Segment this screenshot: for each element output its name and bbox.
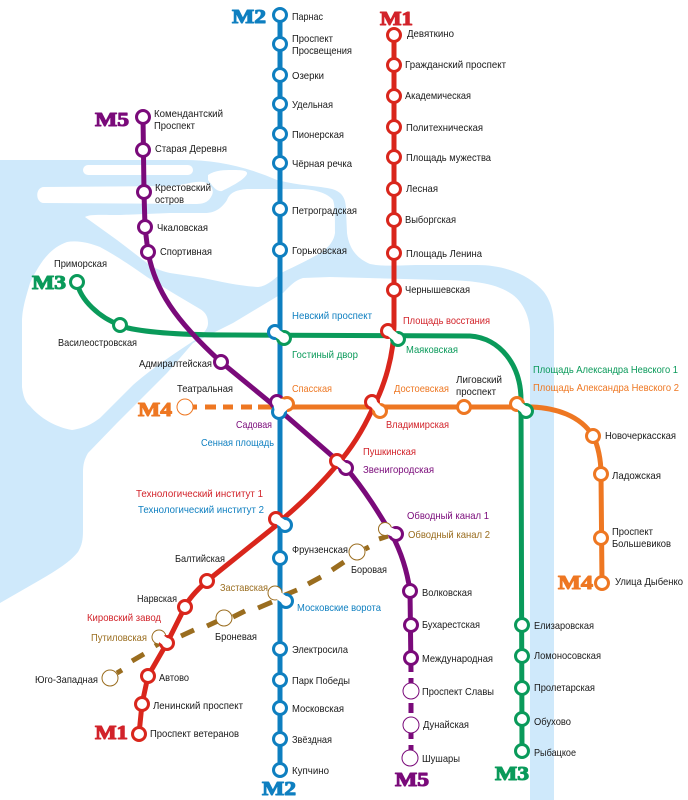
station labels: M1: Проспект ветеранов [150,728,239,740]
station labels: M1: Ленинский проспект [153,700,243,712]
stations: M5 planned purple [402,683,419,766]
interchange: Kirovsky zavod / Putilovskaya [152,630,174,650]
station labels: M3: Рыбацкое [534,747,576,759]
station labels: M5: Чкаловская [157,222,208,234]
line M5 purple dashed extension [408,678,414,750]
station labels: M4: Достоевская [394,383,449,395]
station labels: M2: Невский проспект [292,310,372,322]
station labels: M5: Крестовский [155,182,211,194]
station labels: M4: проспект [456,386,496,398]
station labels: M3: Пролетарская [534,682,595,694]
station labels: M5: Проспект [154,120,195,132]
station labels: M1: Кировский завод [87,612,161,624]
station labels: M4: Лиговский [456,374,502,386]
station labels: M3: Ломоносовская [534,650,601,662]
station labels: M2: Проспект [292,33,333,45]
stations: planned brown [102,544,365,686]
badge: M5 bottom: M5 [395,769,429,791]
station labels: M1: Лесная [406,183,438,195]
station labels: M3: Обухово [534,716,571,728]
badge: M5 top: M5 [95,109,129,131]
station labels: M5: Шушары [422,753,460,765]
station labels: M1: Нарвская [137,593,177,605]
stations: M5 purple [136,110,418,664]
station labels: M2: Парнас [292,11,323,23]
station labels: brown line: Юго-Западная [35,674,98,686]
interchange: Sadovaya / Spasskaya / Sennaya [270,396,294,418]
station labels: M1: Чернышевская [405,284,470,296]
stations: M3 green [70,276,528,758]
interchange: Vosstaniya / Mayakovskaya [382,324,404,346]
station labels: M5: Обводный канал 1 [407,510,489,522]
station labels: M2: Просвещения [292,45,352,57]
station labels: M3: Василеостровская [58,337,137,349]
line M1 red [139,35,394,734]
station labels: M1: Академическая [405,90,471,102]
interchange: Vladimirskaya / Dostoevskaya [366,396,386,418]
station labels: M5: Спортивная [160,246,212,258]
station labels: M3: Маяковская [406,344,458,356]
station labels: M2 [138,11,381,777]
station labels: M5: Звенигородская [363,464,434,476]
interchange: Zastavskaya / Moskovskie vorota [268,586,292,608]
station labels: brown line: Путиловская [91,632,147,644]
station labels: M2: Сенная площадь [201,437,274,449]
station labels: M2: Электросила [292,644,348,656]
station labels: M5: Проспект Славы [422,686,494,698]
station labels: M1: Девяткино [407,28,454,40]
interchange: Tekhnologichesky 1 / 2 [270,512,292,532]
station labels: M1: Гражданский проспект [405,59,506,71]
station labels: M2: Московская [292,703,344,715]
line M3 green [77,282,522,751]
station labels: M2: Технологический институт 2 [138,504,264,516]
station labels: M4: Новочеркасская [605,430,676,442]
interchange: Nevsky / Gostiny [268,326,290,344]
station labels: M4: Ладожская [612,470,661,482]
station labels: M2: Парк Победы [292,675,350,687]
station labels: M1: Пушкинская [363,446,416,458]
stations: planned M4 orange Teatralnaya [177,399,193,415]
station labels: M4: Спасская [292,383,332,395]
line M5 purple [143,117,411,672]
station labels: M1: Площадь мужества [406,152,491,164]
station labels: M1: Политехническая [406,122,483,134]
line M4 brown dashed extension [117,536,388,673]
badge: M2 top: M2 [232,6,266,28]
station labels: brown line: Заставская [220,582,268,594]
station labels: M5: Комендантский [154,108,223,120]
station labels: M2: Чёрная речка [292,158,352,170]
station labels: M2: Озерки [292,70,324,82]
stations: M2 blue [274,8,286,776]
station labels: M2: Удельная [292,99,333,111]
badge: M2 bottom: M2 [262,778,296,800]
station labels: M3: Елизаровская [534,620,594,632]
station labels: brown line [35,529,490,686]
station labels: M3: Гостиный двор [292,349,358,361]
station labels: M1: Технологический институт 1 [136,488,263,500]
station labels: M1 [87,28,506,740]
badge: M3 left: M3 [32,272,66,294]
station labels: M5: Старая Деревня [155,143,227,155]
station labels: M2: Московские ворота [297,602,381,614]
station labels: M4: Большевиков [612,538,671,550]
station labels: M3 [54,258,678,759]
station labels: M2: Звёздная [292,734,332,746]
station labels: M2: Купчино [292,765,329,777]
badge: M3 bottom: M3 [495,763,529,785]
station labels: M5: Садовая [236,419,272,431]
interchange: Alexander Nevsky 1 / 2 [510,398,532,418]
station labels: M1: Автово [159,672,189,684]
station labels: M3: Приморская [54,258,107,270]
station labels: M2: Петроградская [292,205,357,217]
water: rivers and gulf [0,160,554,800]
station labels: M5: Международная [422,653,493,665]
badge: M4 right: M4 [558,572,593,594]
station labels: M4: Театральная [177,383,233,395]
station labels: M4: Проспект [612,526,653,538]
station labels: brown line: Боровая [351,564,387,576]
station labels: M5: Волковская [422,587,472,599]
station labels: M2: Горьковская [292,245,347,257]
station labels: brown line: Броневая [215,631,257,643]
station labels: M5: остров [155,194,184,206]
badge: M4 left: M4 [138,399,172,421]
stations: M4 orange [458,400,608,590]
station labels: M5: Адмиралтейская [139,358,212,370]
line M2 blue [278,15,282,770]
interchange: Obvodny 1 / 2 [378,522,402,540]
station labels: M1: Площадь восстания [403,315,490,327]
station labels: M5: Бухарестская [422,619,480,631]
station labels: M5 [139,108,494,765]
station labels: M4 [177,374,683,588]
station labels: M1: Площадь Ленина [406,248,482,260]
station labels: M2: Пионерская [292,129,344,141]
station labels: M1: Балтийская [175,553,225,565]
station labels: M1: Владимирская [386,419,449,431]
station labels: M2: Фрунзенская [292,544,348,556]
station labels: M1: Выборгская [405,214,456,226]
station labels: brown line: Обводный канал 2 [408,529,490,541]
interchange: Pushkinskaya / Zvenigorodskaya [330,454,352,474]
line M4 orange [287,407,602,583]
station labels: M5: Дунайская [423,719,469,731]
badge: M1 top: M1 [380,8,413,30]
line M4 orange dashed extension [193,404,272,410]
badge: M1 bottom: M1 [95,722,128,744]
stations: M1 red [132,28,400,740]
